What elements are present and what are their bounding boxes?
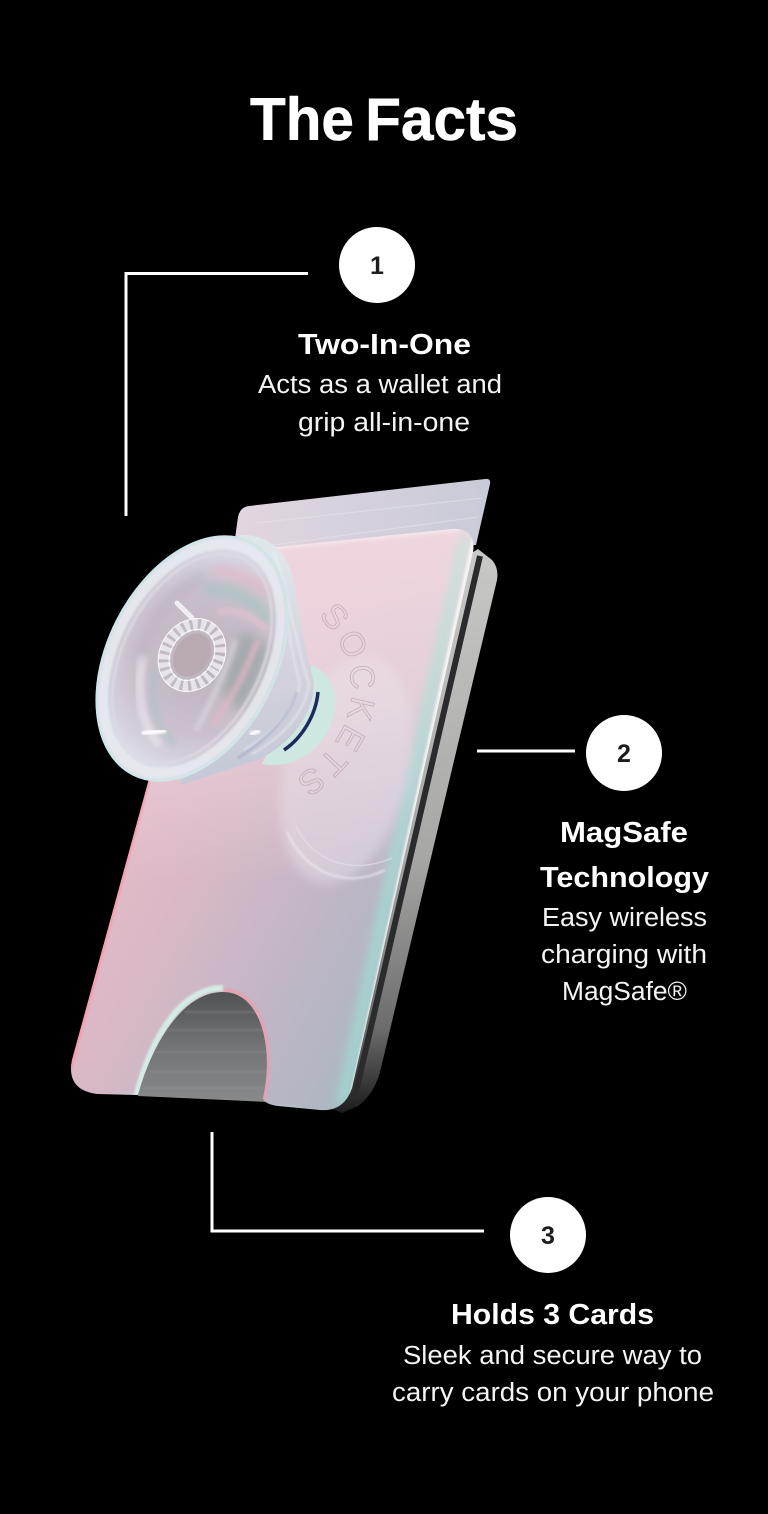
stored card edges bbox=[257, 498, 482, 545]
leader line 2 bbox=[477, 750, 575, 752]
grip collar bbox=[262, 665, 335, 765]
callout 1: Two-In-One: Acts as a wallet and bbox=[258, 371, 502, 399]
badge 3: 3 bbox=[541, 1222, 555, 1250]
callout 2: MagSafe Technology: Technology bbox=[540, 862, 709, 894]
leader line 3 bbox=[212, 1132, 484, 1231]
magnet ring bbox=[280, 667, 412, 884]
callout 1: Two-In-One: grip all-in-one bbox=[298, 409, 470, 437]
callout 2: MagSafe Technology: MagSafe bbox=[560, 817, 688, 849]
grip central emblem bbox=[145, 603, 239, 704]
callout 3: Holds 3 Cards: Holds 3 Cards bbox=[451, 1299, 654, 1331]
callout 2: MagSafe Technology: charging with bbox=[541, 941, 707, 969]
embossed logo: SOCKETS bbox=[299, 604, 375, 794]
badge 2: 2 bbox=[617, 740, 631, 768]
grip highlights bbox=[142, 731, 260, 734]
badge 2 bbox=[586, 715, 662, 791]
dark seam bbox=[355, 556, 480, 1096]
grip lens bbox=[95, 535, 288, 782]
callout 2: MagSafe Technology: Easy wireless bbox=[542, 904, 707, 932]
callout 3: Holds 3 Cards bbox=[392, 1299, 714, 1407]
finger notch backing bbox=[138, 985, 273, 1102]
badge 1 bbox=[339, 227, 415, 303]
title: The Facts bbox=[250, 86, 518, 153]
grip flange bbox=[180, 535, 314, 785]
notch brushed metal texture bbox=[143, 1012, 270, 1088]
callout 3: Holds 3 Cards: carry cards on your phone bbox=[392, 1379, 714, 1407]
leader line 1 bbox=[126, 274, 308, 516]
grip dark base line bbox=[284, 692, 318, 750]
stored cards bbox=[232, 479, 490, 560]
body sheen and iridescent rim bbox=[71, 528, 474, 1108]
badge 1: 1 bbox=[370, 252, 384, 280]
callout 1: Two-In-One bbox=[258, 329, 502, 437]
product: wallet grip bbox=[71, 478, 498, 1113]
callout 2: MagSafe Technology bbox=[540, 817, 709, 1006]
callout 3: Holds 3 Cards: Sleek and secure way to bbox=[403, 1342, 702, 1370]
metal phone backplate bbox=[330, 549, 497, 1113]
badge 3 bbox=[510, 1197, 586, 1273]
callout 2: MagSafe Technology: MagSafe® bbox=[562, 978, 687, 1006]
callout 1: Two-In-One: Two-In-One bbox=[298, 329, 471, 361]
wallet body bbox=[71, 529, 473, 1110]
